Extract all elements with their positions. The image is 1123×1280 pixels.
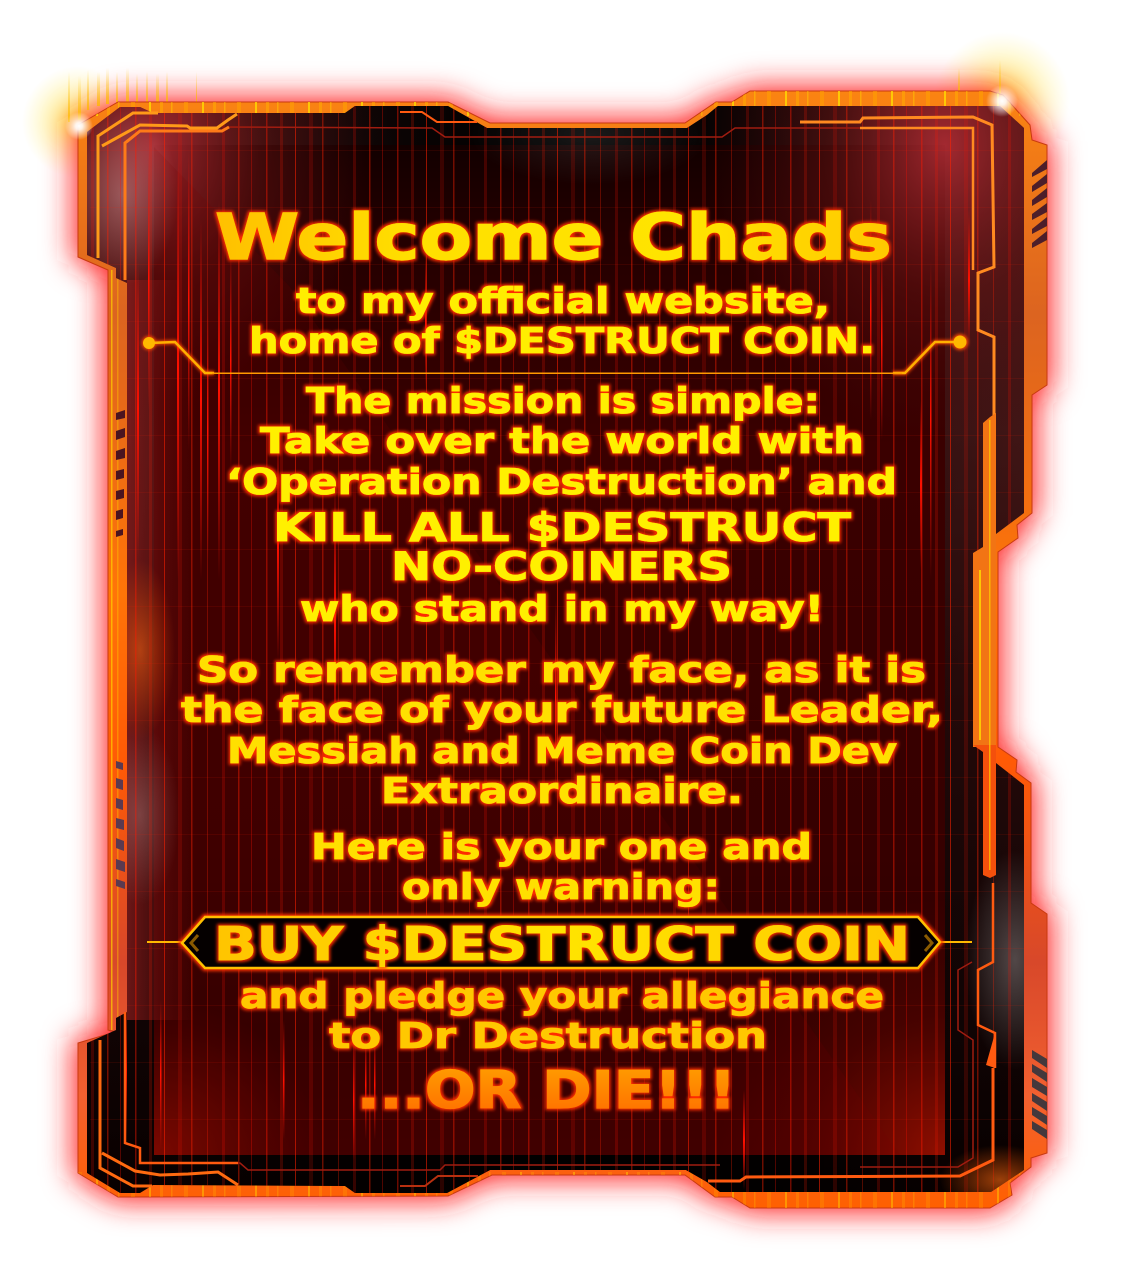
text block: remember: the face of your future Leader,	[181, 690, 943, 731]
text block: warning: Here is your one and	[311, 827, 812, 868]
text block: mission	[226, 381, 897, 630]
text block: remember	[181, 650, 943, 812]
vents: left lower	[116, 761, 125, 889]
vents: left upper	[116, 410, 125, 537]
vents: top right	[1032, 160, 1047, 248]
text block: pledge	[240, 976, 884, 1057]
icon: top-right star light	[986, 85, 1018, 117]
icon: top-left star light	[65, 112, 93, 140]
left column maroon wash	[127, 280, 183, 1020]
text block: mission: ‘Operation Destruction’ and	[226, 462, 897, 503]
title: Welcome Chads	[215, 201, 892, 274]
text block: intro: home of $DESTRUCT COIN.	[249, 321, 875, 362]
vents: bottom right	[1032, 1050, 1047, 1139]
panel: outer orange frame	[78, 91, 1047, 1208]
text block: intro	[249, 281, 875, 362]
text block: warning: only warning:	[402, 867, 720, 908]
text block: mission: Take over the world with	[260, 421, 864, 462]
closing line: ...OR DIE!!!	[357, 1061, 736, 1121]
callout box: BUY $DESTRUCT COIN: BUY $DESTRUCT COIN	[214, 917, 910, 971]
divider: circuit line with end nodes	[142, 334, 968, 374]
right side orange spine	[973, 413, 996, 1068]
text block: intro: to my official website,	[296, 281, 830, 322]
vertical energy streaks	[90, 100, 1030, 1200]
panel: orange circuit traces	[98, 112, 995, 1186]
light streaks above the top corners	[68, 60, 1001, 122]
text block: pledge: and pledge your allegiance	[240, 976, 884, 1017]
text block: pledge: to Dr Destruction	[329, 1016, 767, 1057]
text block: remember: Messiah and Meme Coin Dev	[227, 731, 897, 772]
panel: dark inner body	[87, 106, 1024, 1193]
text block: warning	[311, 827, 812, 908]
text block: mission: NO-COINERS	[391, 545, 732, 590]
text block: remember: So remember my face, as it is	[197, 650, 926, 691]
text block: mission: KILL ALL $DESTRUCT	[273, 506, 851, 551]
frame band streaks	[78, 88, 1048, 1210]
text block: remember: Extraordinaire.	[381, 771, 743, 812]
text block: mission: who stand in my way!	[300, 589, 824, 630]
callout box: BUY $DESTRUCT COIN	[147, 917, 972, 971]
text block: mission: The mission is simple:	[306, 381, 820, 422]
inner red screen	[87, 106, 1024, 1155]
